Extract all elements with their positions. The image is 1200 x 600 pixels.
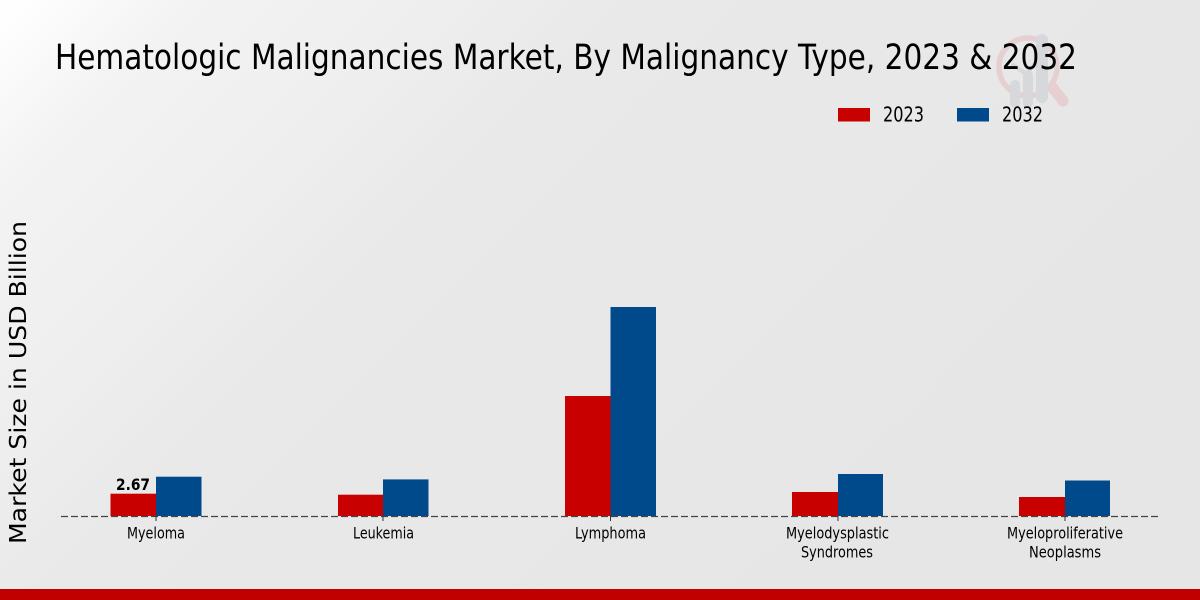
category label: Myeloproliferative Neoplasms: Myeloproliferative	[1007, 524, 1123, 542]
category label: Myelodysplastic Syndromes: Syndromes	[801, 542, 873, 562]
bars: Myelodysplastic Syndromes	[792, 474, 883, 516]
x axis baseline	[61, 516, 1160, 518]
bars: Leukemia	[338, 479, 428, 516]
category label: Myeloproliferative Neoplasms: Neoplasms	[1029, 542, 1101, 562]
data label: 2.67: 2.67	[116, 475, 150, 494]
bars: Myeloproliferative Neoplasms	[1019, 480, 1110, 516]
legend item: 2023	[838, 102, 924, 126]
category label: Lymphoma: Lymphoma	[575, 524, 646, 542]
legend item: 2032	[957, 102, 1043, 126]
category label: Leukemia: Leukemia	[353, 524, 414, 542]
legend	[838, 102, 1043, 126]
legend item: 2023: 2023	[883, 102, 924, 126]
icon: watermark magnifier logo	[999, 38, 1063, 103]
bar chart	[61, 307, 1160, 562]
category label: Myeloma: Myeloma	[127, 524, 185, 542]
category label: Myeloproliferative Neoplasms	[1007, 524, 1123, 562]
axis ticks	[156, 516, 1065, 521]
y axis label: Market Size in USD Billion	[4, 221, 32, 544]
bars: Lymphoma	[565, 307, 656, 516]
category label: Myelodysplastic Syndromes	[786, 524, 889, 562]
bars: Myeloma	[110, 477, 202, 516]
legend item: 2032: 2032	[1002, 102, 1043, 126]
category label: Myelodysplastic Syndromes: Myelodysplastic	[786, 524, 889, 542]
footer bar	[0, 589, 1200, 600]
